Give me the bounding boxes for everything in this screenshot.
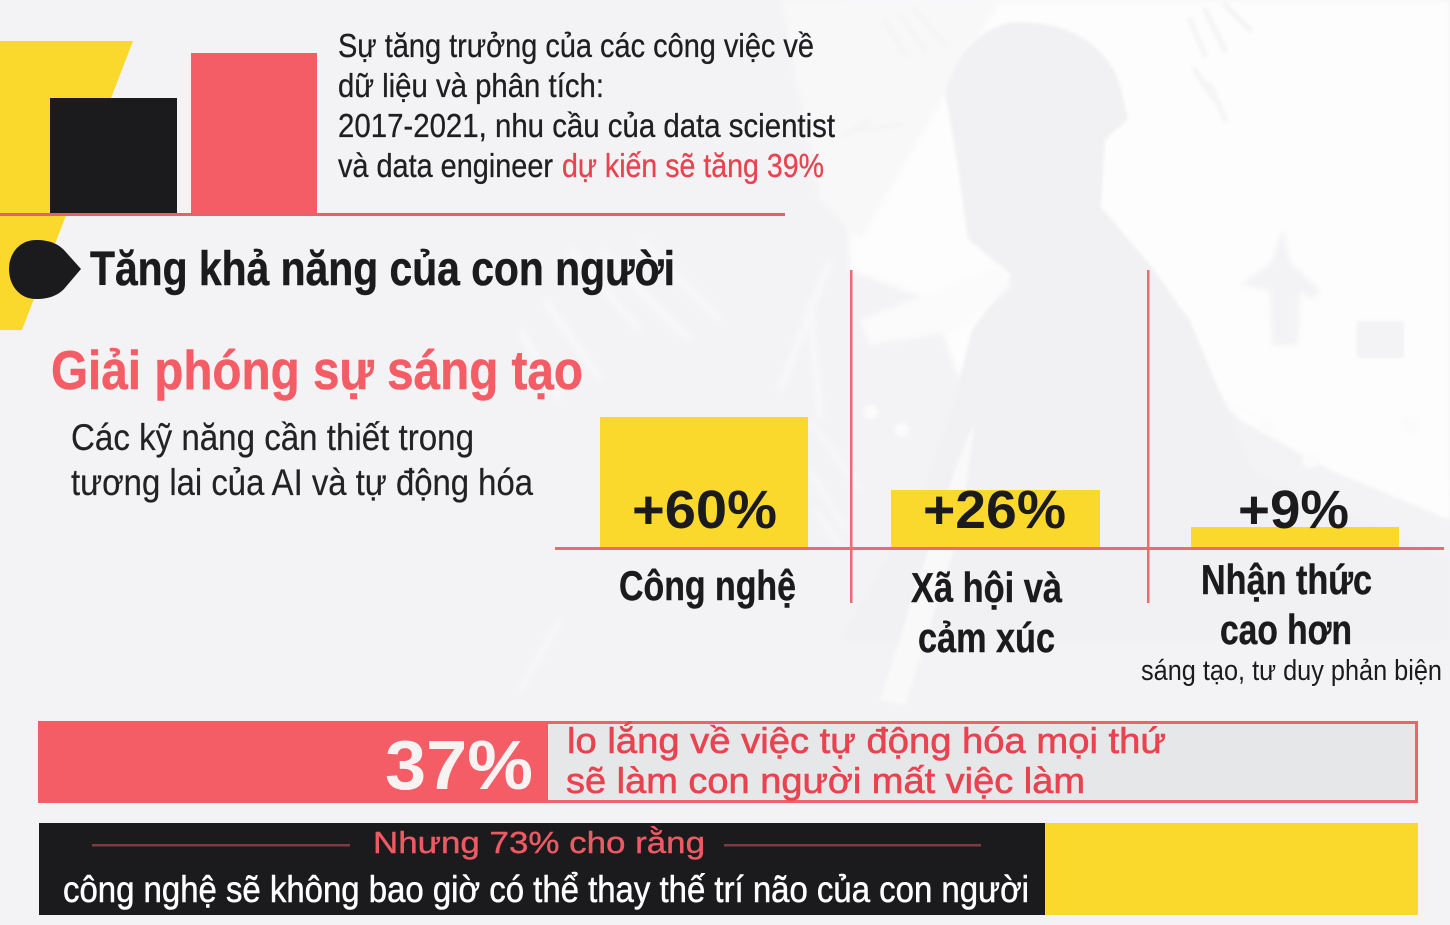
bar: công nghệ [600,417,808,548]
decorative column chart [50,53,317,214]
small distant figure [1240,228,1320,345]
icon: black pointed bullet [9,240,81,299]
text block: skills description [71,417,533,503]
bar: nhận thức cao hơn [1191,480,1399,548]
text block: data job growth: dự kiến sẽ tăng 39% [562,147,824,184]
text block: data job growth [338,27,835,184]
text block: data job growth: 2017-2021, nhu cầu của data scientist [338,107,835,144]
text block: skills description: tương lai của AI và tự động hóa [71,462,533,503]
text: 73% lead-in: Nhưng 73% cho rằng [373,825,705,860]
panel: 73% belief bar [39,823,1418,915]
panel: 37% worry bar [38,720,1416,804]
category label: xã hội và cảm xúc: cảm xúc [918,614,1055,661]
category label: nhận thức cao hơn: cao hơn [1220,606,1352,653]
heading: red subtitle: Giải phóng sự sáng tạo [51,339,583,401]
text block: data job growth: dữ liệu và phân tích: [338,67,604,104]
yellow slanted accent shape [0,41,133,330]
heading: section title: Tăng khả năng của con người [90,243,675,296]
category label: nhận thức cao hơn: Nhận thức [1201,556,1372,603]
bar: nhận thức cao hơn: +9% [1238,480,1349,540]
stat: 37%: 37% [385,726,533,804]
bar: xã hội và cảm xúc [891,480,1100,548]
column: black [50,98,177,214]
text block: skills description: Các kỹ năng cần thiết trong [71,417,474,458]
category label: xã hội và cảm xúc [911,564,1063,661]
category label: xã hội và cảm xúc: Xã hội và [911,564,1063,611]
silhouette of person [840,22,1450,640]
text: belief statement: công nghệ sẽ không bao giờ có thể thay thế trí não của con người [63,869,1029,910]
text: worry statement: lo lắng về việc tự động hóa mọi thứ [567,720,1166,761]
bar: công nghệ: +60% [632,480,777,540]
bar: xã hội và cảm xúc: +26% [923,480,1066,540]
text: worry statement [566,720,1166,801]
category label: nhận thức cao hơn [1141,556,1442,687]
text block: data job growth: và data engineer [338,147,553,184]
category label: công nghệ: Công nghệ [619,562,796,609]
text block: data job growth: Sự tăng trưởng của các công việc về [338,27,814,64]
baseline rule under columns [0,213,785,216]
text: worry statement: sẽ làm con người mất việc làm [566,760,1085,801]
column: red [191,53,317,214]
bar chart: skill growth [555,270,1444,687]
